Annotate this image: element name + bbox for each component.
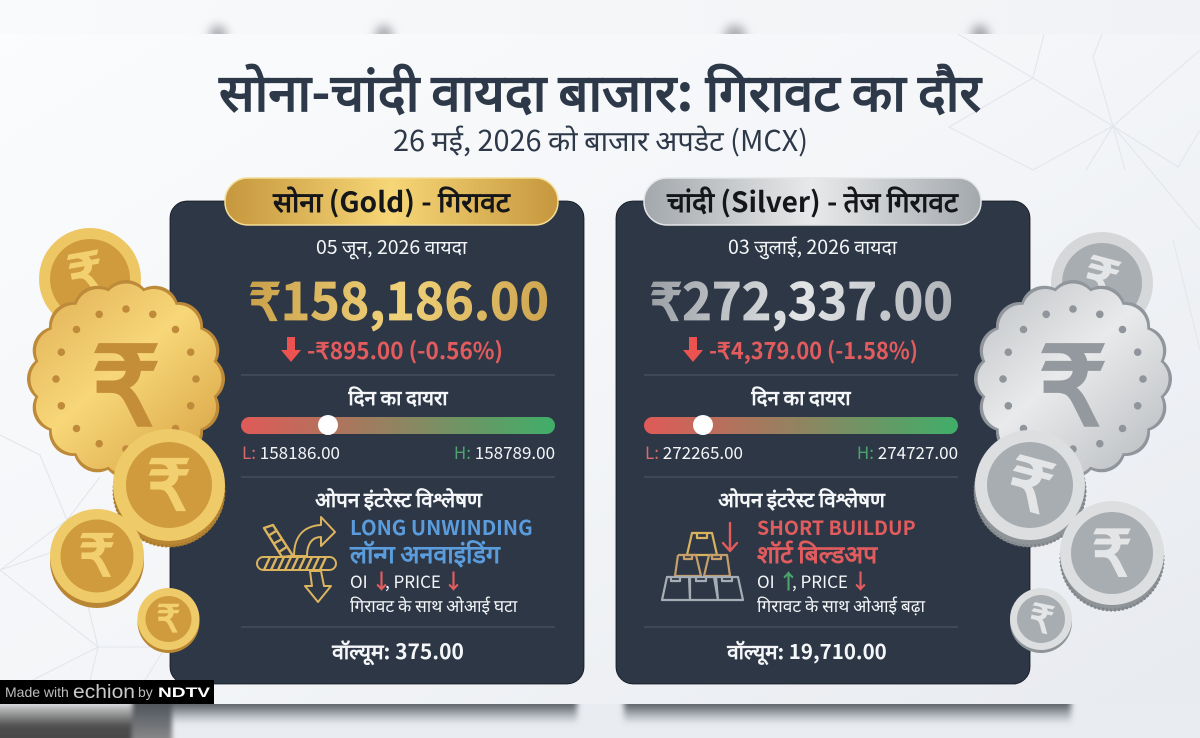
high value: H: 158789.00 [454, 439, 555, 464]
analysis: short buildup: ↑ [778, 566, 799, 596]
silver coins [974, 232, 1172, 653]
icon: rope unwinding [257, 517, 336, 602]
coin: small: ₹ [1024, 586, 1059, 645]
analysis: long unwinding: लॉन्ग अनवाइंडिंग [349, 535, 501, 571]
analysis: long unwinding: ↓ [443, 566, 464, 596]
coin: top: ₹ [1075, 232, 1129, 317]
price: ₹158,186.00 [249, 261, 549, 335]
watermark badge [0, 680, 214, 704]
coin: large [113, 429, 225, 547]
analysis: short buildup: OI [757, 568, 775, 593]
low value: L: 158186.00 [242, 439, 340, 464]
open interest heading: ओपन इंटरेस्ट विश्लेषण [315, 483, 483, 513]
analysis: short buildup [757, 512, 925, 617]
high value: H: 274727.00 [857, 439, 958, 464]
analysis: short buildup: , PRICE [792, 568, 848, 593]
analysis: short buildup: शॉर्ट बिल्डअप [757, 535, 878, 571]
price: ₹272,337.00 [650, 261, 953, 335]
coin: medium: ₹ [1092, 503, 1132, 595]
panel: silver [616, 178, 1030, 684]
heading pill: gold [225, 178, 558, 225]
watermark badge: by [138, 684, 153, 700]
coin: medium [50, 509, 144, 608]
volume: वॉल्यूम: 375.00 [331, 636, 464, 666]
day range label: दिन का दायरा [347, 381, 448, 411]
coin: top [1051, 232, 1153, 334]
coin: medium [1060, 501, 1164, 611]
coin: small: ₹ [156, 588, 181, 643]
analysis: short buildup: गिरावट के साथ ओआई बढ़ा [757, 592, 925, 617]
coin: large: ₹ [997, 426, 1066, 535]
panel: gold [170, 178, 584, 684]
scalloped coin: ₹ [91, 297, 161, 457]
range bar [241, 415, 555, 435]
analysis: long unwinding: LONG UNWINDING [350, 511, 533, 541]
heading pill: gold: सोना (Gold) - गिरावट [272, 181, 511, 221]
coin: top [39, 227, 141, 330]
analysis: long unwinding: गिरावट के साथ ओआई घटा [350, 592, 518, 617]
analysis: long unwinding: , PRICE [385, 568, 441, 593]
low value: L: 272265.00 [645, 439, 743, 464]
analysis: short buildup: ↓ [850, 566, 871, 596]
analysis: short buildup: SHORT BUILDUP [757, 512, 916, 541]
coin: large: ₹ [147, 430, 191, 531]
open interest heading: ओपन इंटरेस्ट विश्लेषण [718, 483, 886, 513]
day range label: दिन का दायरा [750, 381, 851, 411]
icon: stacked bars with down arrow [662, 523, 743, 600]
scalloped coin [974, 280, 1172, 478]
range bar [644, 415, 958, 435]
bottom blurred band [0, 704, 1076, 738]
coin: top: ₹ [61, 227, 110, 313]
volume: वॉल्यूम: 19,710.00 [726, 635, 887, 666]
scalloped coin: ₹ [1038, 297, 1108, 457]
gold coins [27, 227, 225, 653]
top blurred band [203, 19, 996, 34]
scalloped coin [27, 280, 225, 478]
coin: large [974, 426, 1086, 547]
heading pill: silver: चांदी (Silver) - तेज गिरावट [666, 181, 959, 221]
price change: -₹895.00 (-0.56%) [307, 332, 503, 366]
watermark badge: NDTV [158, 684, 211, 700]
contract date: 03 जुलाई, 2026 वायदा [728, 231, 898, 260]
contract date: 05 जून, 2026 वायदा [316, 231, 468, 260]
title: सोना-चांदी वायदा बाजार: गिरावट का दौर [218, 51, 983, 126]
analysis: long unwinding: ↓ [371, 566, 392, 596]
watermark badge: Made with [5, 684, 69, 700]
coin: small [1010, 586, 1072, 653]
watermark badge: echion [73, 682, 135, 703]
analysis: long unwinding [349, 511, 533, 617]
subtitle: 26 मई, 2026 को बाजार अपडेट (MCX) [393, 119, 808, 160]
analysis: long unwinding: OI [350, 568, 368, 593]
coin: medium: ₹ [79, 509, 115, 593]
price change: -₹4,379.00 (-1.58%) [709, 332, 918, 366]
coin: small [138, 588, 200, 653]
